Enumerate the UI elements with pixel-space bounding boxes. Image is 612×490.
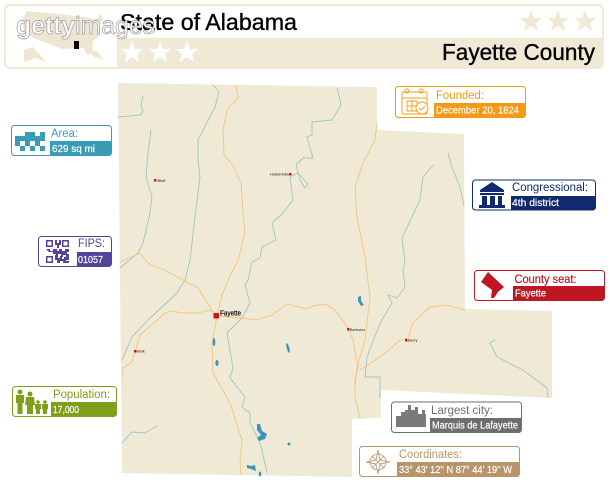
- icon: skyline: [396, 405, 426, 427]
- panel: County seat: [474, 270, 604, 300]
- panel: Largest city: Marquis de Lafayette: [432, 420, 518, 432]
- panel: Population: 17,000: [53, 404, 79, 416]
- icon: capitol building: [479, 182, 505, 208]
- panel: FIPS: [38, 236, 112, 266]
- city: Fayette (county seat): Fayette: [220, 310, 241, 318]
- city: Bankston: Bankston: [350, 327, 365, 332]
- panel: County seat: Fayette: [515, 288, 546, 300]
- panel: FIPS: FIPS:: [78, 238, 105, 250]
- rivers: [118, 85, 548, 473]
- panel: Congressional: 4th district: [512, 197, 559, 209]
- icon: area blocks: [15, 132, 45, 151]
- panel: Founded: [396, 86, 526, 118]
- panel: Largest city: Largest city:: [431, 405, 493, 417]
- panel: Area: Area:: [51, 128, 78, 140]
- city: Hubbertville: Hubbertville: [270, 172, 290, 176]
- panel: header banner: [5, 5, 603, 68]
- icon: calendar: [402, 89, 428, 114]
- panel: Area: [12, 126, 112, 156]
- panel: Population: [12, 386, 116, 416]
- panel: Founded: Founded:: [436, 90, 484, 102]
- county shape: [118, 83, 552, 477]
- panel: Area: 629 sq mi: [52, 143, 95, 155]
- city: Bluff: Bluff: [158, 178, 166, 183]
- panel: County seat: County seat:: [514, 274, 576, 286]
- panel: Population: Population:: [53, 389, 110, 401]
- icon: QR code: [46, 240, 69, 263]
- panel: Coordinates: 33° 43' 12'' N 87° 44' 19'' W: [399, 464, 512, 476]
- stars: white row: [121, 41, 198, 62]
- city: Belk: Belk: [137, 348, 145, 354]
- panel: Congressional: Congressional:: [512, 182, 588, 194]
- panel: Founded: December 20, 1824: [436, 104, 519, 116]
- city: Bluff: [154, 178, 166, 183]
- panel: Largest city: [392, 402, 522, 432]
- panel: Coordinates: Coordinates:: [399, 449, 462, 461]
- lakes: [213, 296, 364, 476]
- panel: Coordinates: [360, 446, 520, 476]
- icon: US locator map: [22, 11, 104, 62]
- panel: FIPS: 01057: [78, 254, 103, 266]
- title: state: State of Alabama: [120, 9, 297, 35]
- city: Berry: Berry: [408, 338, 418, 342]
- panel: Congressional: [472, 180, 596, 210]
- watermark: gettyimages: [16, 12, 155, 40]
- icon: district shape: [481, 272, 504, 298]
- roads: [120, 85, 465, 475]
- title: county: Fayette County: [442, 39, 595, 65]
- icon: family: [16, 390, 48, 414]
- city: Fayette (county seat): [214, 310, 241, 318]
- map: Fayette County: [118, 83, 552, 477]
- stars: cream row: [520, 10, 596, 31]
- icon: compass rose: [366, 450, 390, 474]
